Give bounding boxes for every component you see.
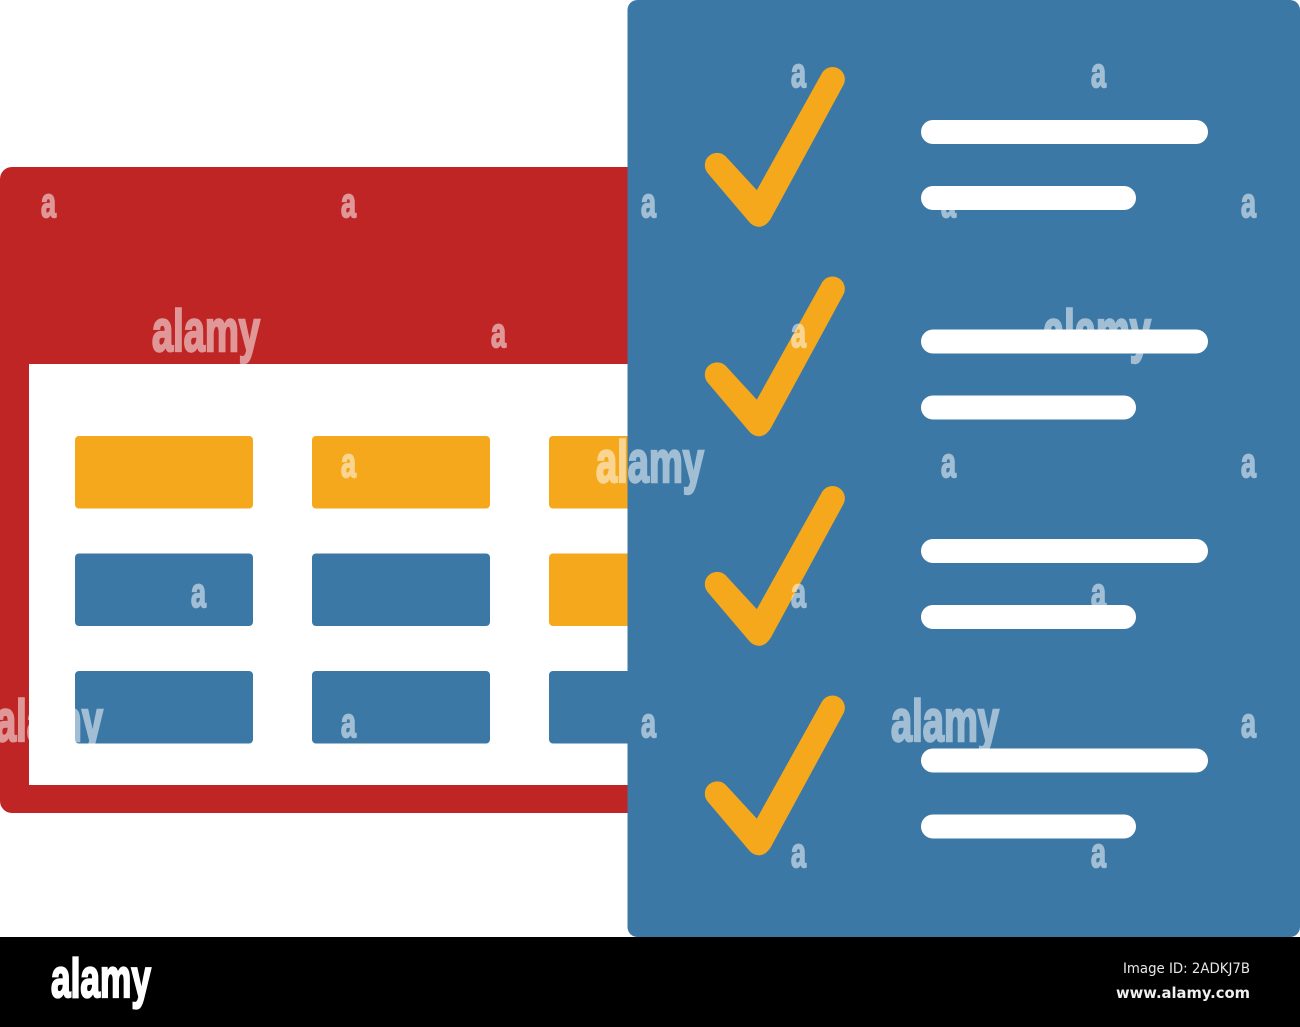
watermarks: a <box>941 179 956 226</box>
footer logo: alamy <box>51 947 151 1009</box>
watermarks <box>0 49 1256 876</box>
watermarks: a <box>41 179 56 226</box>
checklist item 1 <box>706 68 1208 226</box>
watermarks: a <box>791 49 806 96</box>
watermarks: alamy <box>1043 299 1151 364</box>
watermarks: a <box>1241 439 1256 486</box>
watermarks: a <box>1091 829 1106 876</box>
watermarks: a <box>341 179 356 226</box>
row 2 cells <box>75 554 649 626</box>
checklist item 4 <box>706 696 1208 855</box>
watermarks: alamy <box>891 689 999 754</box>
watermarks: alamy <box>596 430 704 495</box>
row 3 cells <box>75 671 649 744</box>
panel: checklist <box>628 0 1300 937</box>
watermarks: a <box>191 569 206 616</box>
calendar frame <box>0 167 660 813</box>
checklist item 2 <box>706 277 1208 436</box>
watermarks: a <box>1091 49 1106 96</box>
watermarks: a <box>791 569 806 616</box>
panel: calendar <box>0 167 660 813</box>
watermarks: alamy <box>152 299 260 364</box>
watermarks: a <box>1241 699 1256 746</box>
checklist sheet <box>628 0 1300 937</box>
watermarks: a <box>341 699 356 746</box>
checklist item 3 <box>706 487 1208 645</box>
footer bar <box>0 937 1300 1027</box>
watermarks: a <box>341 439 356 486</box>
calendar body <box>29 364 649 785</box>
watermarks: a <box>941 439 956 486</box>
watermarks: a <box>1091 569 1106 616</box>
watermarks: a <box>641 179 656 226</box>
watermarks: a <box>491 309 506 356</box>
row 1 cells <box>75 436 649 508</box>
watermarks: a <box>1241 179 1256 226</box>
watermarks: a <box>641 699 656 746</box>
watermarks: a <box>791 829 806 876</box>
website: www.alamy.com <box>1116 984 1250 1002</box>
image id: Image ID: 2ADKJ7B <box>1123 961 1250 977</box>
watermarks: a <box>791 309 806 356</box>
